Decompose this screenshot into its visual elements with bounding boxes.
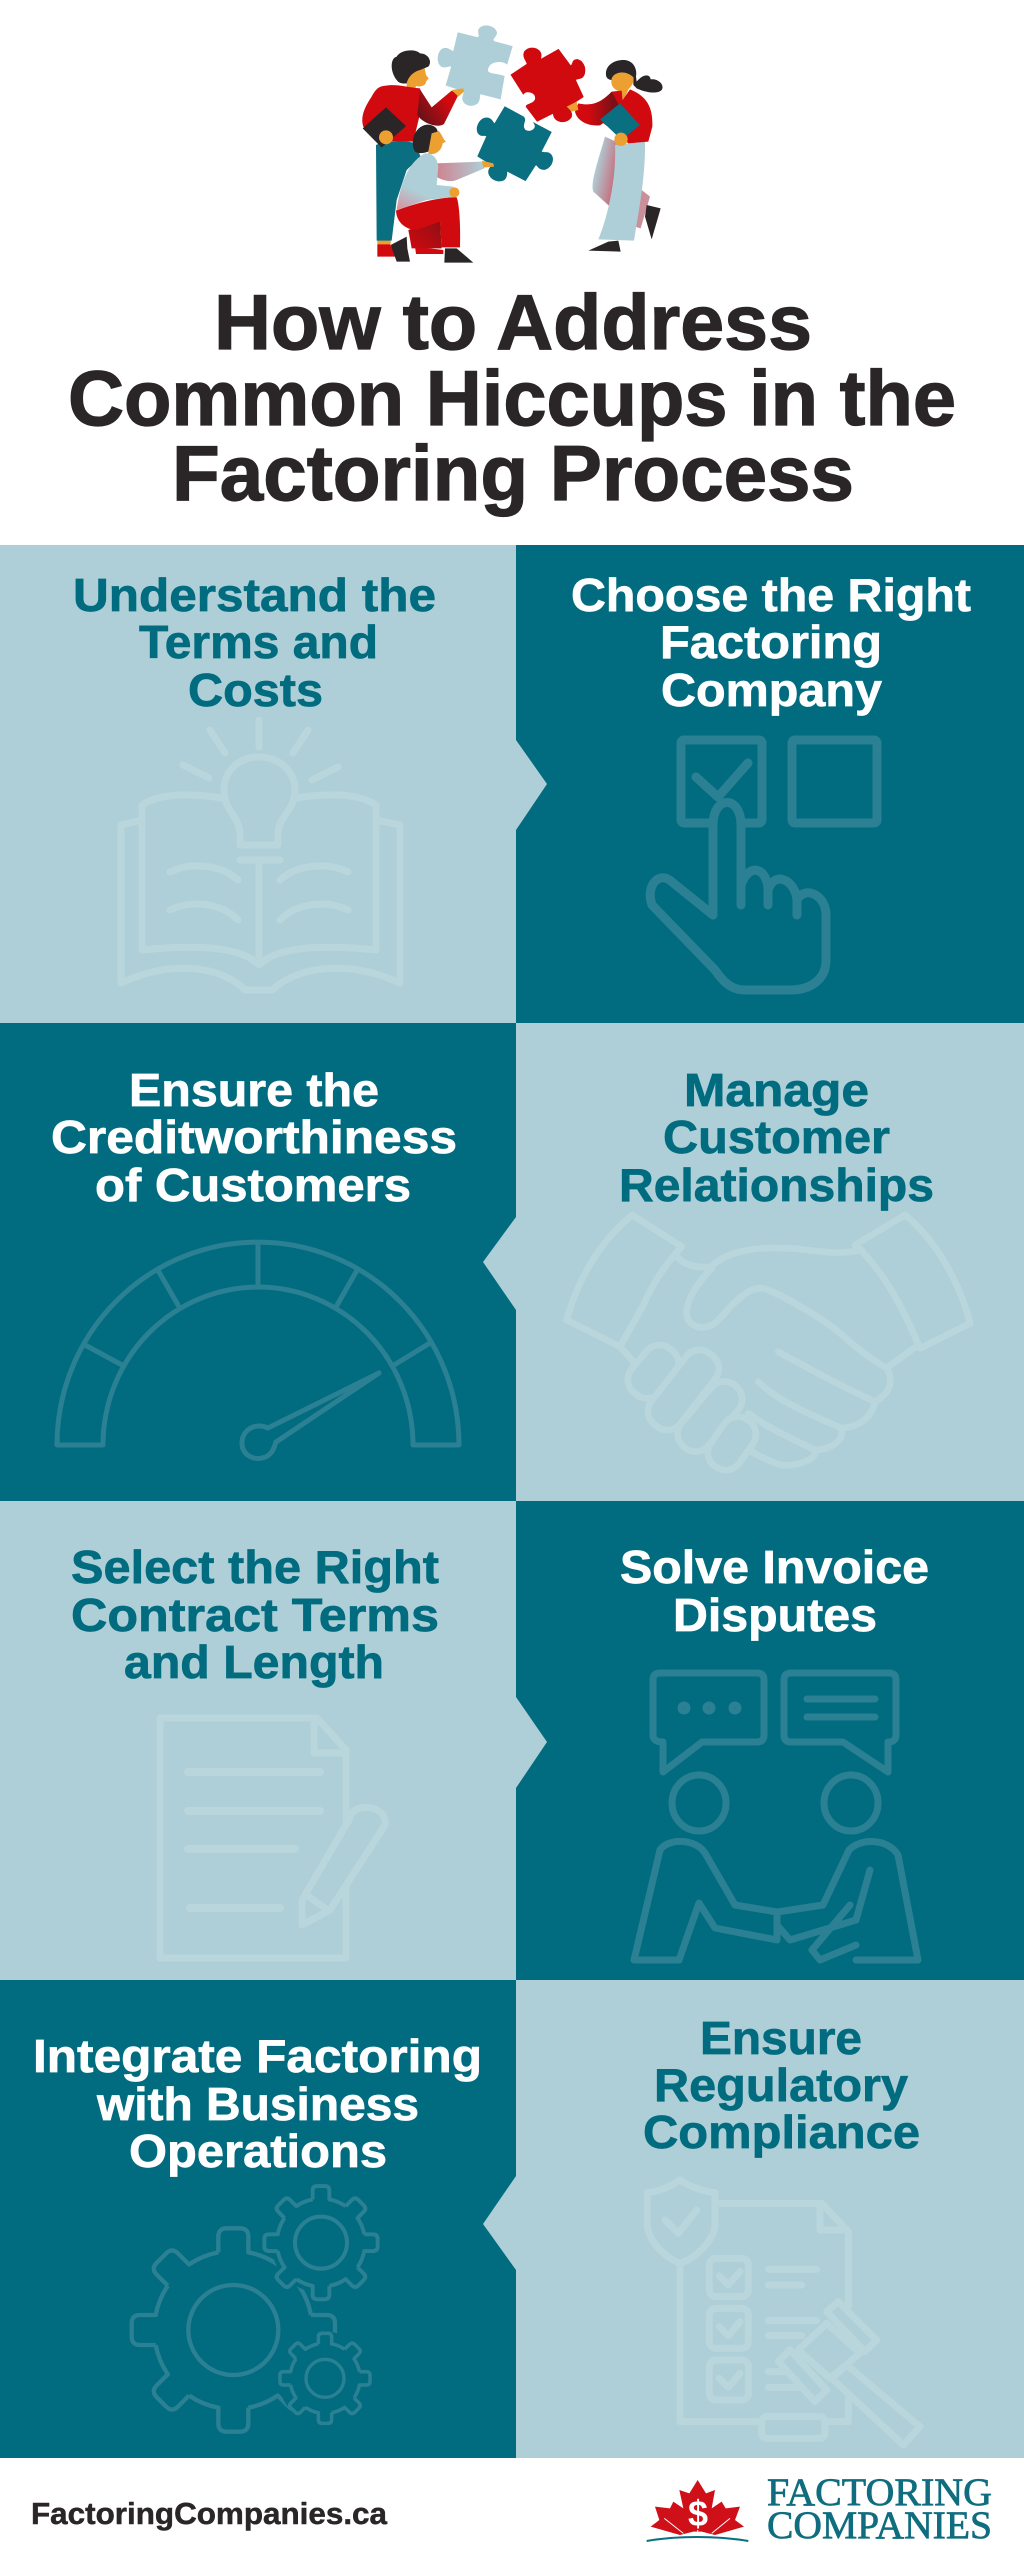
heading: choose the right factoring company: Company <box>661 664 882 716</box>
arrow: row 3 pointing right <box>516 1697 547 1788</box>
arrow: row 2 pointing left <box>483 1217 516 1310</box>
heading: ensure regulatory compliance <box>643 2012 920 2158</box>
heading: integrate factoring with business operations <box>33 2030 482 2177</box>
heading: ensure the creditworthiness of customers <box>51 1064 457 1211</box>
panel: ensure the creditworthiness of customers <box>51 1064 459 1458</box>
icon: contract and pencil <box>160 1718 385 1958</box>
logo: factoring companies <box>647 2471 992 2547</box>
heading: select the right contract terms and length: and Length <box>124 1636 384 1688</box>
arrow: row 4 pointing left <box>483 2176 516 2270</box>
dollar sign: $ <box>688 2493 708 2534</box>
person: standing man <box>362 50 464 257</box>
heading: integrate factoring with business operations: Operations <box>129 2125 387 2177</box>
panel: understand the terms and costs <box>73 569 436 990</box>
logo wordmark: FACTORING <box>767 2471 992 2514</box>
heading: understand the terms and costs: Understand the <box>73 569 436 621</box>
person: woman with folder <box>567 60 663 252</box>
panel: manage customer relationships <box>567 1064 970 1477</box>
icon: maple leaf with dollar sign <box>647 2480 748 2541</box>
heading: ensure the creditworthiness of customers: Creditworthiness <box>51 1111 457 1163</box>
heading: ensure regulatory compliance: Regulatory <box>654 2059 908 2111</box>
panel: solve invoice disputes <box>620 1541 929 1960</box>
heading: solve invoice disputes: Disputes <box>673 1589 877 1641</box>
heading: manage customer relationships: Customer <box>663 1111 890 1163</box>
panel: select the right contract terms and length <box>71 1541 439 1958</box>
icon: compliance checklist, shield and gavel <box>647 2180 920 2445</box>
panel grid backgrounds <box>0 545 1024 2458</box>
heading: select the right contract terms and length: Select the Right <box>71 1541 439 1593</box>
heading: solve invoice disputes: Solve Invoice <box>620 1541 929 1593</box>
heading: solve invoice disputes <box>620 1541 929 1641</box>
title <box>68 278 956 517</box>
icon: hand clicking checkbox <box>650 740 877 990</box>
heading: ensure regulatory compliance: Compliance <box>643 2106 920 2158</box>
heading: understand the terms and costs: Terms and <box>139 616 378 668</box>
title: Factoring Process <box>172 429 854 517</box>
heading: integrate factoring with business operations: Integrate Factoring <box>33 2030 482 2082</box>
person: crouching man <box>391 125 494 263</box>
heading: integrate factoring with business operations: with Business <box>96 2078 419 2130</box>
panel: ensure regulatory compliance <box>643 2012 920 2445</box>
panel: choose the right factoring company <box>571 569 971 990</box>
icon: two people with speech bubbles <box>634 1673 918 1960</box>
heading: ensure the creditworthiness of customers: Ensure the <box>129 1064 379 1116</box>
arrow: row 1 pointing right <box>516 740 547 830</box>
heading: ensure the creditworthiness of customers: of Customers <box>95 1159 411 1211</box>
illustration: team assembling puzzle pieces <box>362 26 663 263</box>
title: Common Hiccups in the <box>68 354 956 442</box>
icon: handshake <box>567 1215 970 1477</box>
heading: select the right contract terms and length: Contract Terms <box>71 1589 439 1641</box>
heading: choose the right factoring company: Factoring <box>660 616 882 668</box>
heading: choose the right factoring company: Choose the Right <box>571 569 971 621</box>
heading: manage customer relationships: Relationships <box>619 1159 934 1211</box>
icon: credit score gauge <box>57 1242 459 1458</box>
panel: integrate factoring with business operations <box>33 2030 482 2433</box>
heading: select the right contract terms and length <box>71 1541 439 1688</box>
icon: open book with light bulb <box>121 720 400 990</box>
logo wordmark: COMPANIES <box>767 2504 992 2547</box>
heading: understand the terms and costs: Costs <box>188 664 323 716</box>
heading: manage customer relationships <box>619 1064 934 1211</box>
footer website text: FactoringCompanies.ca <box>31 2496 388 2531</box>
puzzle piece: red <box>512 48 585 121</box>
icon: gears <box>130 2185 378 2433</box>
logo wordmark <box>767 2471 992 2547</box>
title: How to Address <box>214 278 812 366</box>
heading: understand the terms and costs <box>73 569 436 716</box>
heading: ensure regulatory compliance: Ensure <box>700 2012 862 2064</box>
heading: manage customer relationships: Manage <box>684 1064 869 1116</box>
puzzle piece: light blue <box>439 26 512 105</box>
heading: choose the right factoring company <box>571 569 971 716</box>
puzzle piece: teal <box>478 107 552 181</box>
